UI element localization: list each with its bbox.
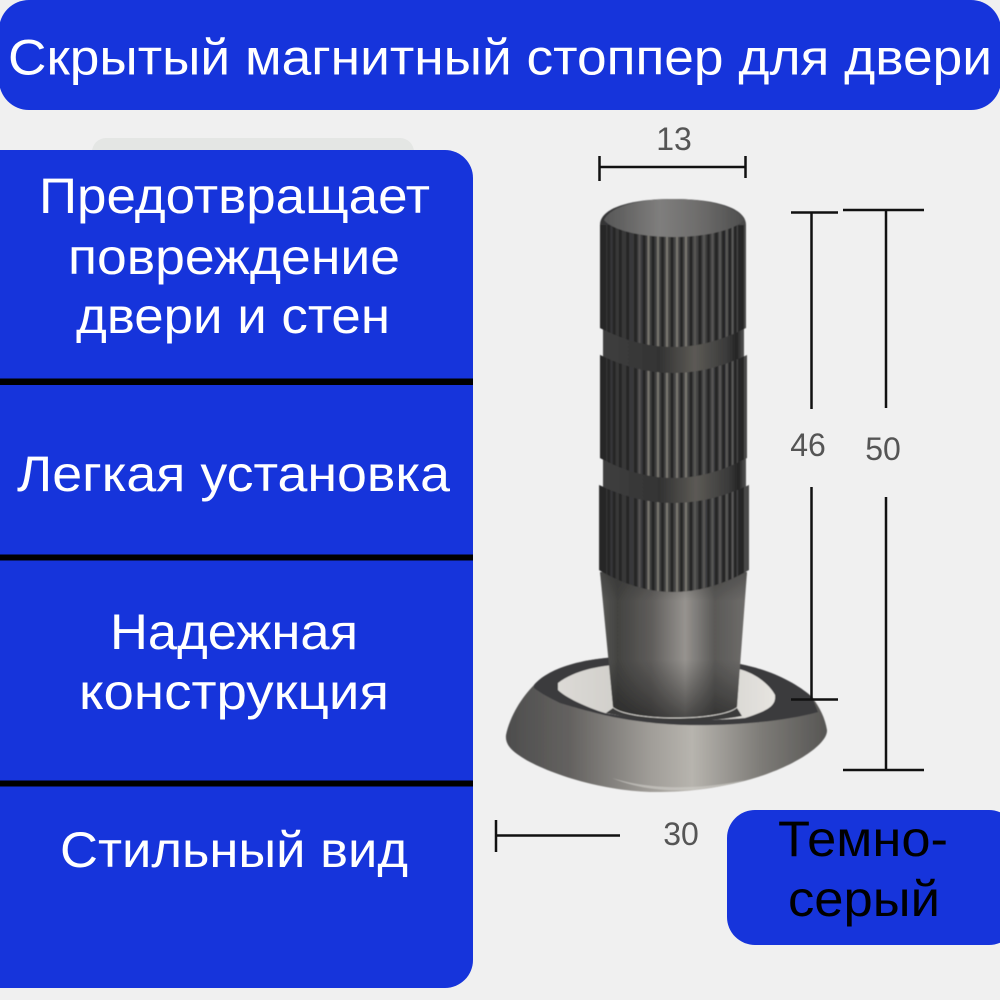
benefit: prevents damage: Предотвращает <box>39 168 430 224</box>
product image: door stopper <box>506 199 827 792</box>
benefit: reliable construction <box>79 604 389 720</box>
title text: Скрытый магнитный стоппер для двери <box>8 30 992 86</box>
benefit: prevents damage <box>39 168 430 344</box>
benefit: prevents damage: повреждение <box>68 229 400 285</box>
dimension: height 50: 50 <box>865 431 901 467</box>
benefit: easy installation: Легкая установка <box>17 446 450 502</box>
dimension: base 30: 30 <box>663 816 699 852</box>
dimension: base 30 <box>496 816 699 852</box>
tapered neck <box>600 572 747 718</box>
benefit: prevents damage: двери и стен <box>76 288 390 344</box>
colour badge <box>727 810 1000 945</box>
panel: benefits list <box>0 138 473 988</box>
benefit: reliable construction: Надежная <box>110 604 358 660</box>
top cap <box>604 199 744 237</box>
benefit: stylish look: Стильный вид <box>60 822 408 878</box>
dimension: height 46: 46 <box>790 427 826 463</box>
dimension: width 13: 13 <box>656 121 692 157</box>
dimension: width 13 <box>600 121 746 181</box>
benefit: reliable construction: конструкция <box>79 664 389 720</box>
dimension: height 46 <box>790 212 838 700</box>
title banner <box>0 0 1000 110</box>
knurled handle <box>599 199 749 610</box>
colour badge: Темно- <box>778 811 948 867</box>
colour badge: серый <box>788 871 940 927</box>
base ring <box>506 657 827 792</box>
dimension: height 50 <box>843 210 924 770</box>
grooved bands <box>603 325 746 510</box>
